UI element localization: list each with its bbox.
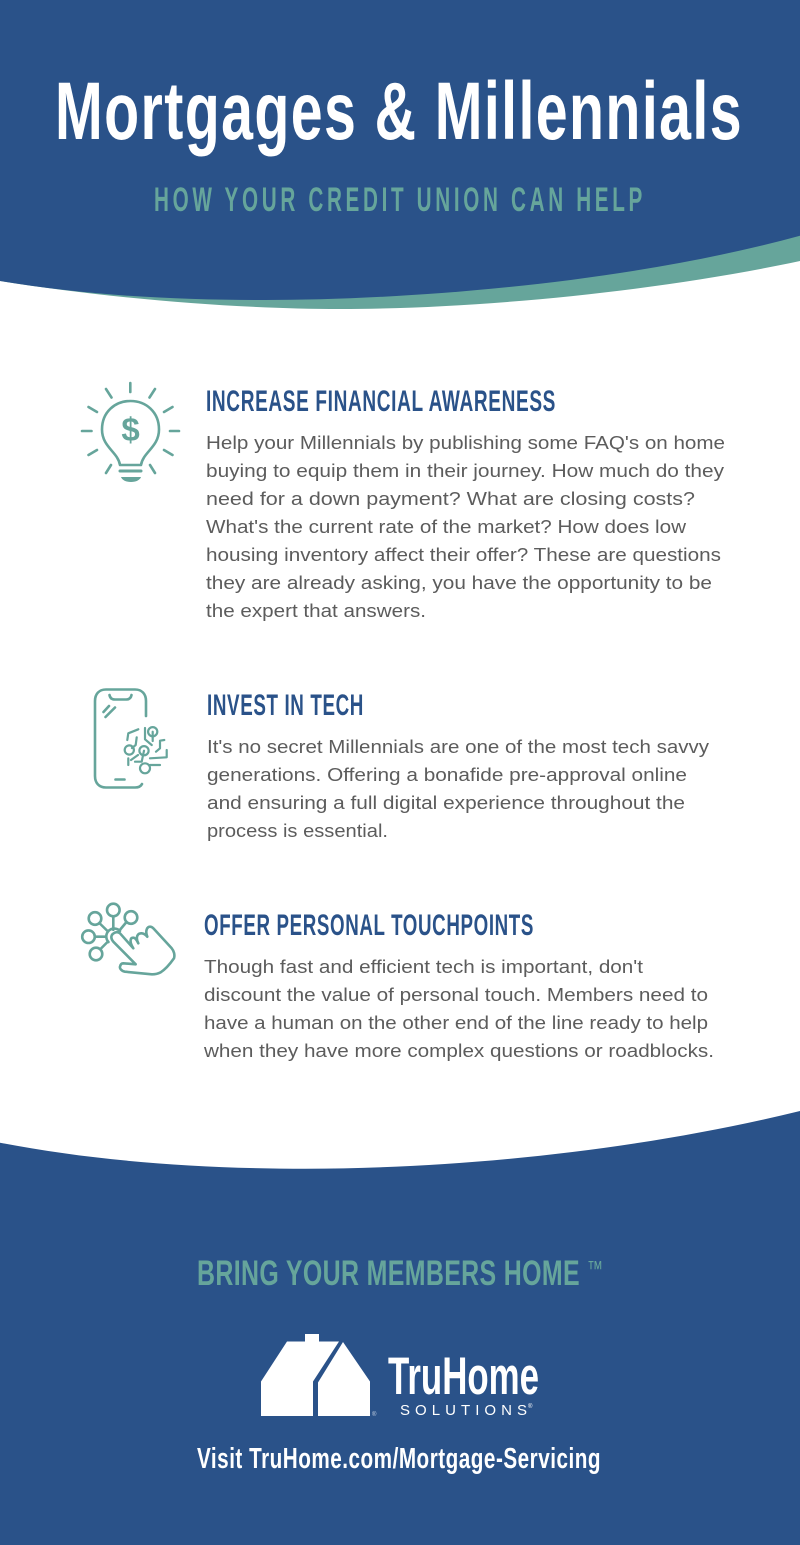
logo: TruHome Solutions: ® [528,1403,533,1410]
house mark [261,1334,370,1416]
section 2 body: and ensuring a full digital experience throughout the [207,792,685,813]
section 1 body: buying to equip them in their journey. How much do they [206,460,725,481]
section 2 body: generations. Offering a bonafide pre-approval online [207,764,687,785]
header band [0,0,800,309]
logo: TruHome Solutions: ® [372,1411,377,1418]
logo: TruHome Solutions: SOLUTIONS [400,1402,527,1419]
section 1 body [206,432,725,621]
section 3 body: when they have more complex questions or roadblocks. [203,1040,714,1061]
section 3 heading: OFFER PERSONAL TOUCHPOINTS [204,909,534,942]
icon: light bulb with dollar sign: $ [121,411,140,448]
section 2 body [207,736,710,841]
footer band [0,1111,800,1545]
call to action: BRING YOUR MEMBERS HOME [197,1254,580,1293]
section 3 body [203,956,714,1061]
section 3 body: Though fast and efficient tech is important, don't [204,956,643,977]
teal swoosh [0,236,800,309]
logo: TruHome Solutions [261,1334,539,1419]
section 1 body: housing inventory affect their offer? These are questions [206,544,721,565]
logo: TruHome Solutions: TruHome [388,1347,539,1406]
website link text: Visit TruHome.com/Mortgage-Servicing [197,1443,601,1475]
icon: hand touching network [82,904,174,974]
section 1 body: the expert that answers. [206,600,426,621]
blue header shape [0,0,800,300]
section 1 heading: INCREASE FINANCIAL AWARENESS [206,385,556,418]
section 1 body: What's the current rate of the market? How does low [206,516,687,537]
section 1 body: they are already asking, you have the opportunity to be [206,572,712,593]
section 3 body: discount the value of personal touch. Members need to [204,984,708,1005]
section 1 body: need for a down payment? What are closing costs? [206,488,695,509]
section 1 body: Help your Millennials by publishing some FAQ's on home [206,432,725,453]
section 3 body: have a human on the other end of the line ready to help [204,1012,708,1033]
section 2 body: process is essential. [207,820,388,841]
call to action: ™ [587,1256,603,1281]
icon: light bulb with dollar sign [82,383,179,482]
section 2 body: It's no secret Millennials are one of the most tech savvy [207,736,710,757]
section 2 heading: INVEST IN TECH [207,689,364,722]
icon: phone with circuit [95,690,167,788]
